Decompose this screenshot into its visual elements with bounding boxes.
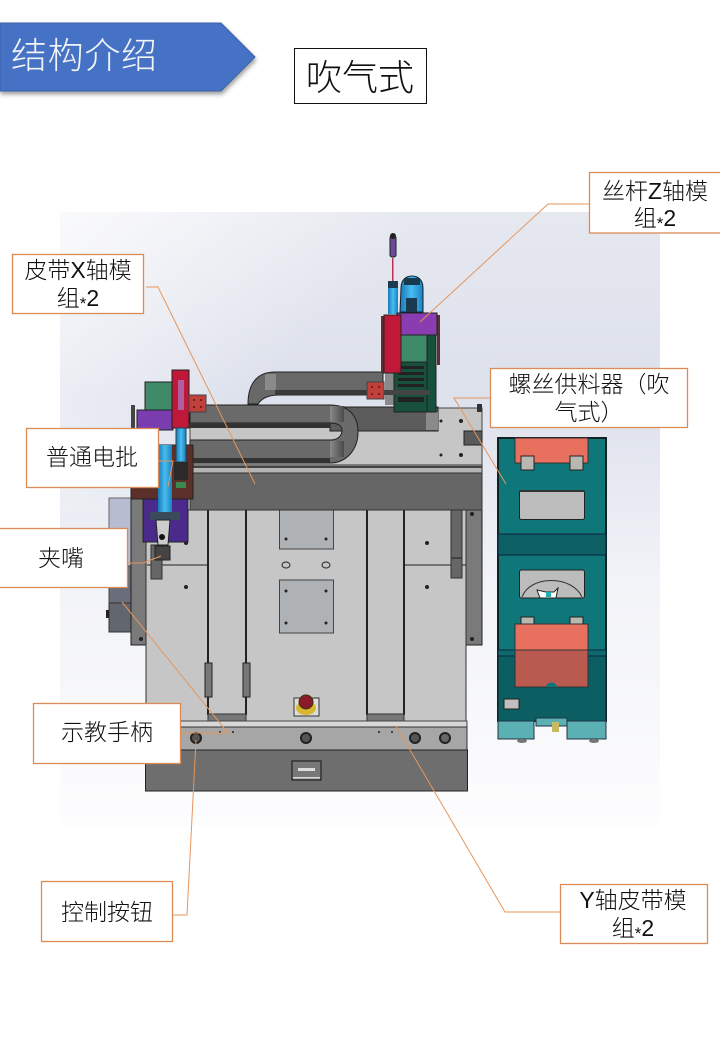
label: screw feeder: 螺丝供料器（吹 bbox=[508, 371, 670, 397]
label: Y axis belt module: 组 bbox=[612, 915, 635, 941]
Z-axis head right bbox=[367, 233, 440, 412]
left tool head bbox=[131, 370, 206, 560]
machine main assembly bbox=[106, 233, 606, 791]
label: X axis belt module: 2 bbox=[86, 285, 99, 311]
subtitle box: 吹气式 bbox=[306, 57, 414, 98]
upper plate bbox=[190, 404, 482, 465]
label: teach pendant bbox=[34, 704, 180, 764]
label: X axis belt module: 皮带X轴模 bbox=[24, 257, 132, 283]
title arrow banner: 结构介绍 bbox=[11, 35, 157, 76]
background render panel bbox=[60, 212, 660, 826]
label: Z axis module: 2 bbox=[663, 205, 676, 231]
side rails bbox=[131, 405, 482, 645]
label: teach pendant: 示教手柄 bbox=[61, 719, 153, 745]
label: Z axis module: 组 bbox=[634, 205, 657, 231]
label: Y axis belt module: 2 bbox=[641, 915, 654, 941]
label: Y axis belt module bbox=[560, 884, 708, 944]
label: X axis belt module bbox=[12, 254, 144, 314]
subtitle box bbox=[294, 48, 426, 104]
label: clamp nozzle bbox=[0, 528, 128, 588]
lower cabinet bbox=[146, 750, 468, 791]
leader lines bbox=[122, 204, 589, 915]
label: X axis belt module: * bbox=[80, 294, 87, 313]
side teach pendant bbox=[106, 498, 131, 632]
label: Z axis module: * bbox=[657, 214, 664, 233]
label: Z axis module bbox=[590, 172, 720, 233]
label: Y axis belt module: * bbox=[635, 924, 642, 943]
upper cable chain bbox=[248, 372, 383, 404]
label: Z axis module: 丝杆Z轴模 bbox=[602, 178, 708, 204]
label: control buttons: 控制按钮 bbox=[61, 899, 153, 925]
base plate bbox=[146, 510, 466, 722]
label: screw feeder: 气式） bbox=[554, 399, 624, 425]
label: clamp nozzle: 夹嘴 bbox=[38, 545, 84, 571]
X-axis beam bbox=[190, 465, 482, 510]
feeder bbox=[498, 438, 606, 743]
front bar and control knobs bbox=[146, 721, 467, 750]
label: Y axis belt module: Y轴皮带模 bbox=[579, 887, 687, 913]
lower cable chain bbox=[190, 405, 438, 463]
label: electric screwdriver: 普通电批 bbox=[46, 444, 138, 470]
title arrow banner bbox=[0, 23, 255, 91]
label: screw feeder bbox=[490, 368, 688, 428]
label: X axis belt module: 组 bbox=[57, 285, 80, 311]
label: electric screwdriver bbox=[26, 428, 158, 488]
emergency stop button bbox=[294, 695, 319, 716]
label: control buttons bbox=[42, 882, 172, 942]
